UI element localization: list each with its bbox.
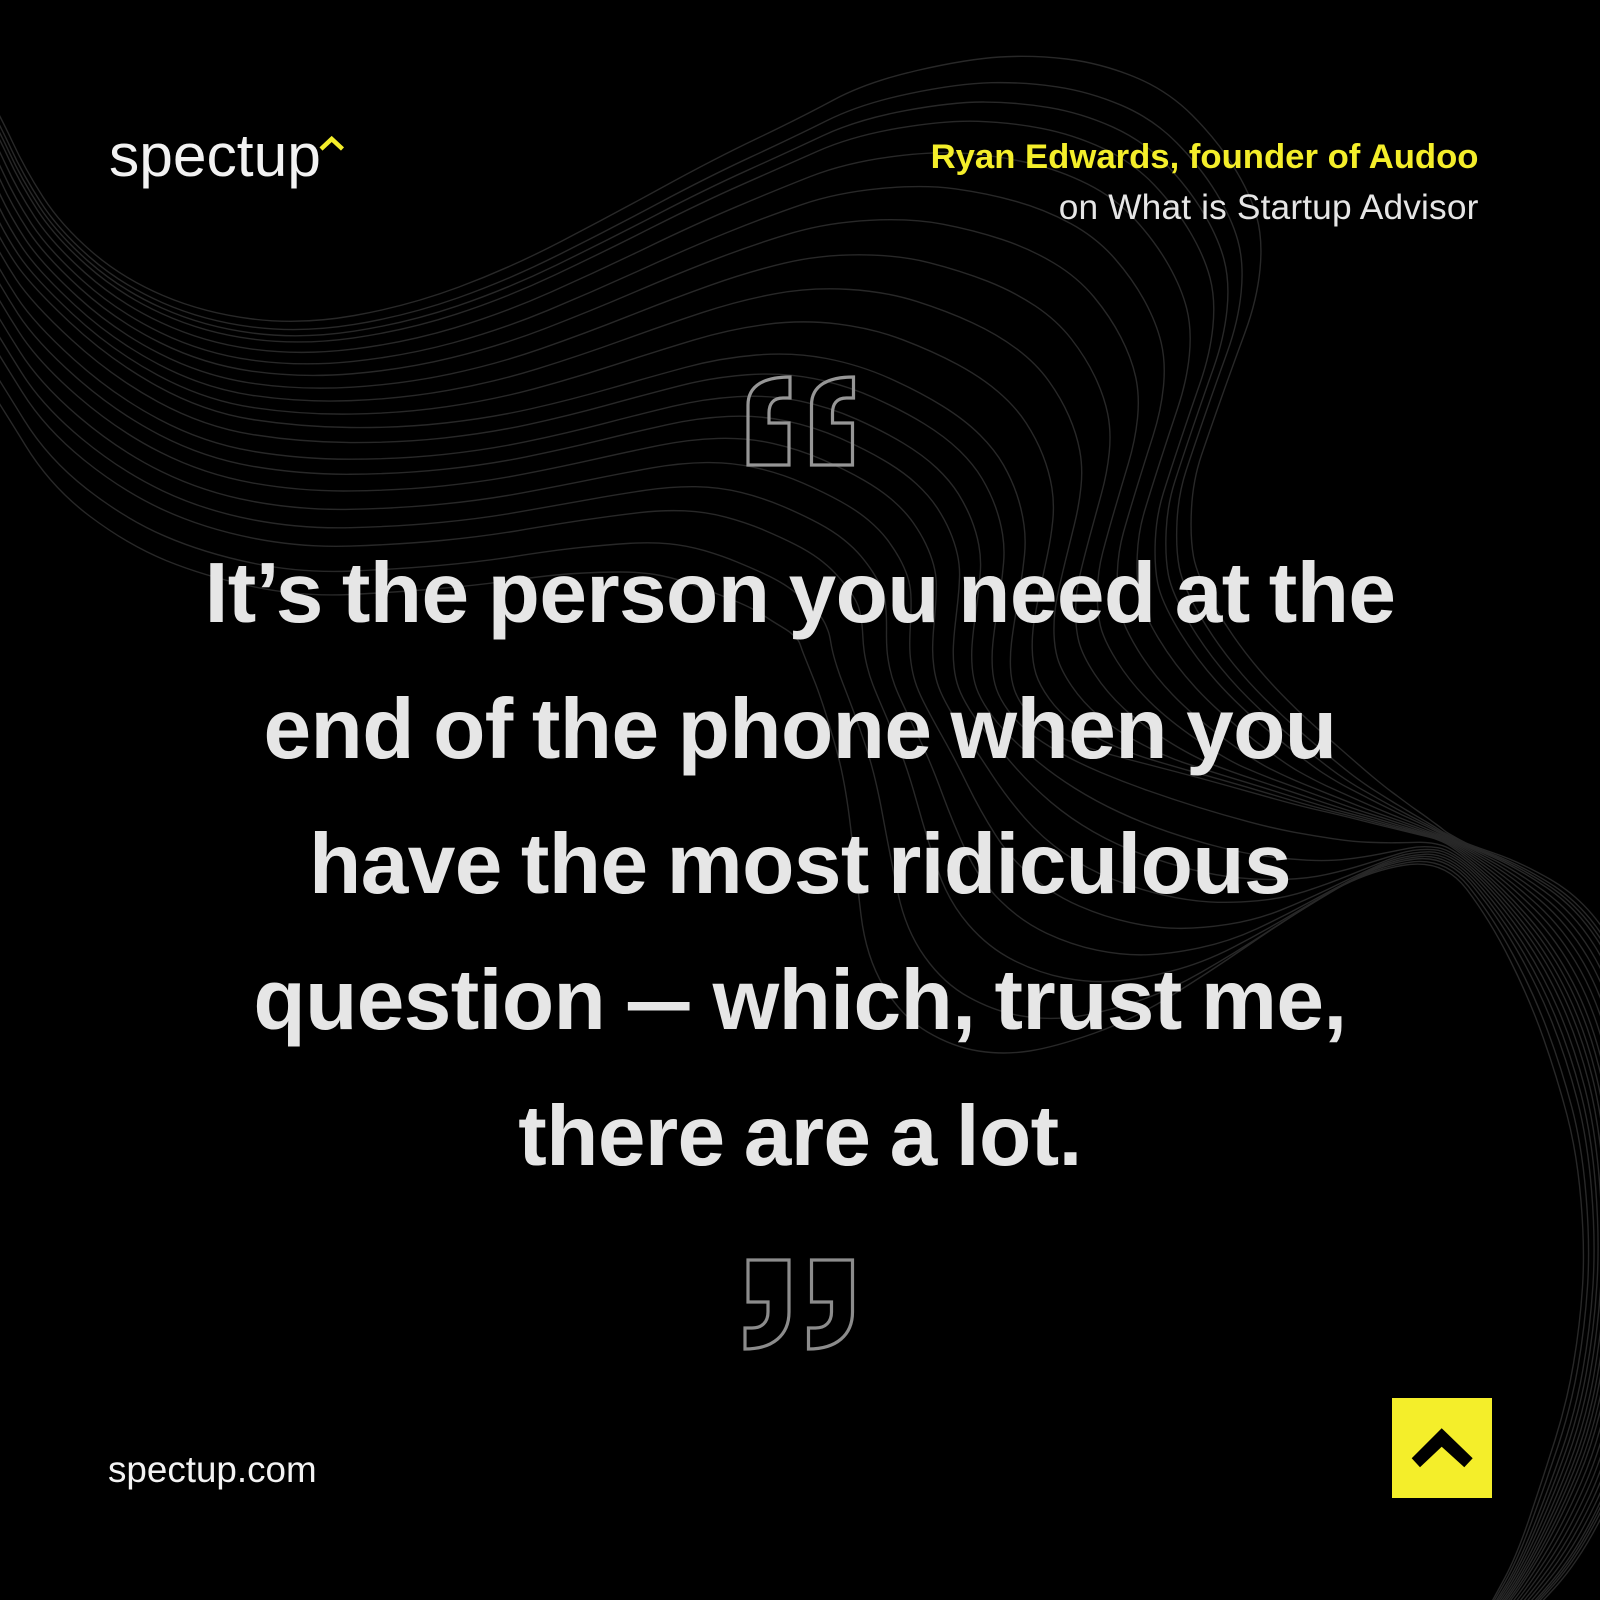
attribution: topic: on What is Startup Advisor [1059, 188, 1478, 227]
quote text: — [628, 953, 690, 1048]
quote text: there are a lot. [518, 1089, 1082, 1184]
quote text: have the most ridiculous [309, 817, 1291, 912]
quote text: question which, trust me, [253, 953, 1347, 1048]
quote text: It’s the person you need at the [205, 546, 1395, 641]
logo: spectup wordmark: spectup [109, 121, 321, 189]
website address: spectup.com [108, 1449, 317, 1490]
attribution: speaker name: Ryan Edwards, founder of Audoo [931, 138, 1478, 176]
quote text: end of the phone when you [264, 682, 1336, 777]
